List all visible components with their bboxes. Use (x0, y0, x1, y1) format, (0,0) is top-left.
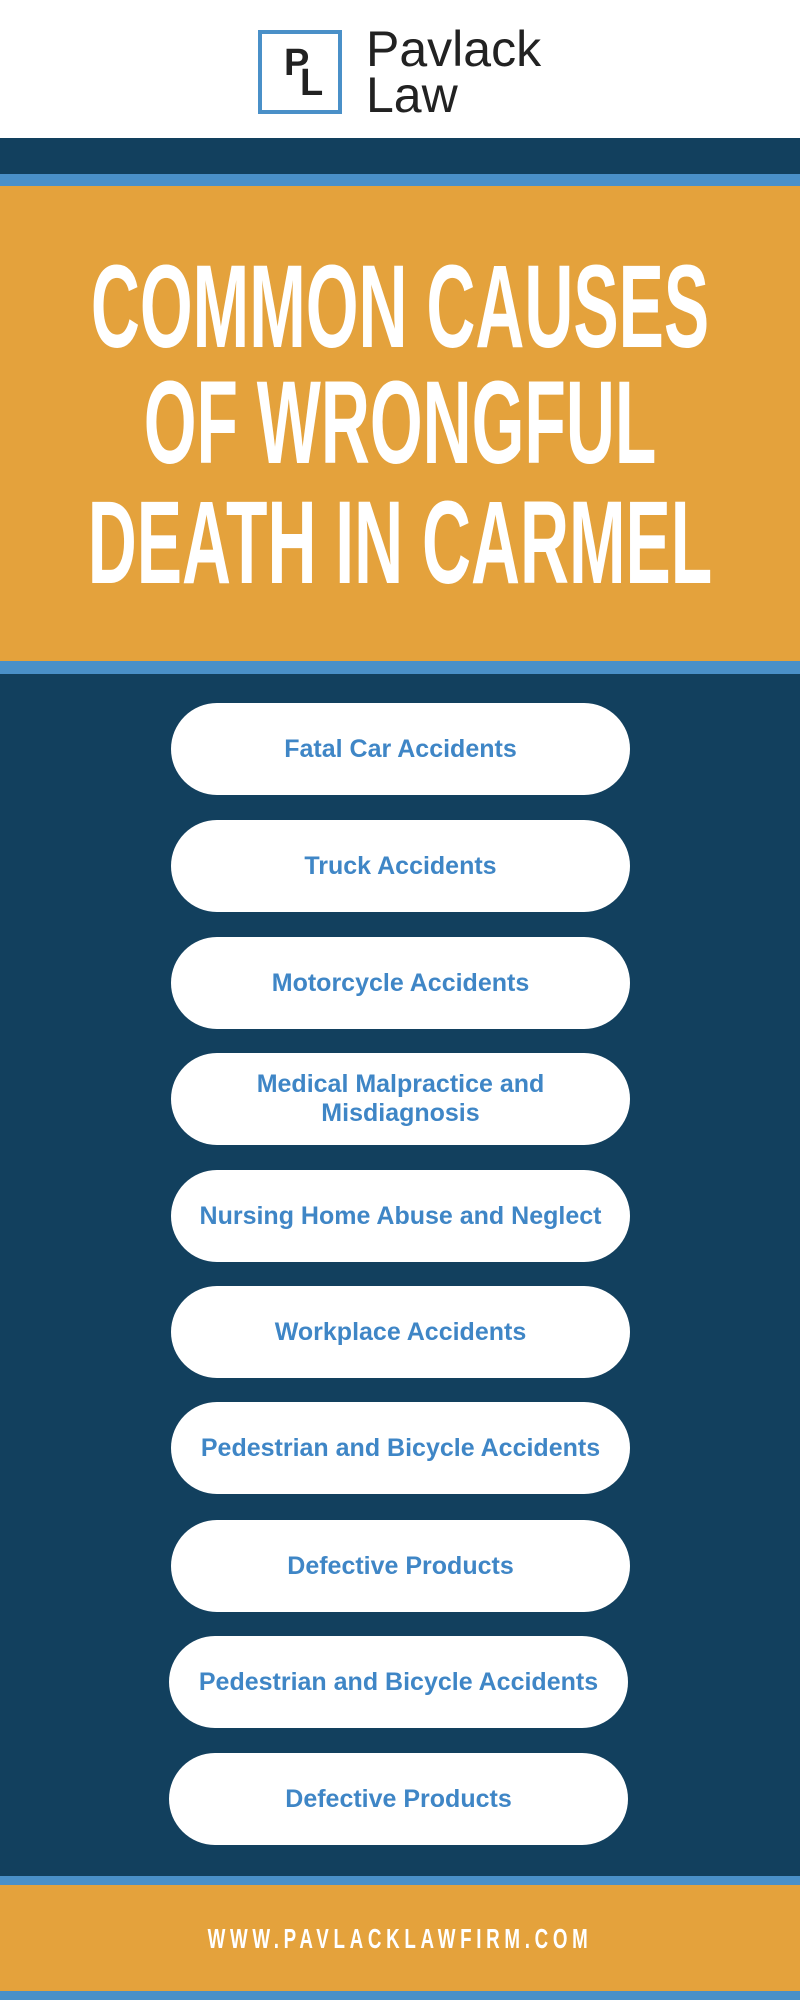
logo (258, 21, 542, 123)
pill: fatal car: Fatal Car Accidents (284, 735, 517, 763)
pill: defective: Defective Products (287, 1552, 514, 1580)
pill: fatal car (171, 703, 630, 795)
pill: defective (171, 1520, 630, 1612)
icon: PL monogram: P (284, 42, 309, 84)
pill: truck (171, 820, 630, 912)
list of causes (169, 703, 630, 1845)
pill: defective 2 (169, 1753, 628, 1845)
pill: pedestrian: Pedestrian and Bicycle Accidents (201, 1434, 600, 1462)
icon: PL monogram (258, 30, 342, 114)
pill: medical: Misdiagnosis (321, 1099, 480, 1127)
pill: defective 2: Defective Products (285, 1785, 512, 1813)
pill: workplace: Workplace Accidents (275, 1318, 526, 1346)
icon: PL monogram: L (300, 62, 323, 104)
footer (0, 1885, 800, 1991)
pill: nursing home: Nursing Home Abuse and Neglect (200, 1202, 601, 1230)
title: COMMON CAUSES (91, 241, 709, 373)
header (0, 0, 800, 138)
pill: truck: Truck Accidents (304, 852, 497, 880)
pill: motorcycle: Motorcycle Accidents (272, 969, 529, 997)
pill: motorcycle (171, 937, 630, 1029)
pill: pedestrian 2 (169, 1636, 628, 1728)
pill: workplace (171, 1286, 630, 1378)
footer url: WWW.PAVLACKLAWFIRM.COM (208, 1923, 592, 1954)
logo text: Pavlack (366, 21, 541, 77)
pill: pedestrian 2: Pedestrian and Bicycle Accidents (199, 1668, 598, 1696)
pill: medical (171, 1053, 630, 1145)
title banner (0, 186, 800, 661)
title (88, 241, 712, 609)
pill: nursing home (171, 1170, 630, 1262)
pill: medical: Medical Malpractice and (257, 1070, 544, 1098)
logo text: Law (366, 67, 458, 123)
pill: pedestrian (171, 1402, 630, 1494)
title: OF WRONGFUL (144, 357, 656, 489)
title: DEATH IN CARMEL (88, 477, 712, 609)
logo text (366, 21, 542, 123)
